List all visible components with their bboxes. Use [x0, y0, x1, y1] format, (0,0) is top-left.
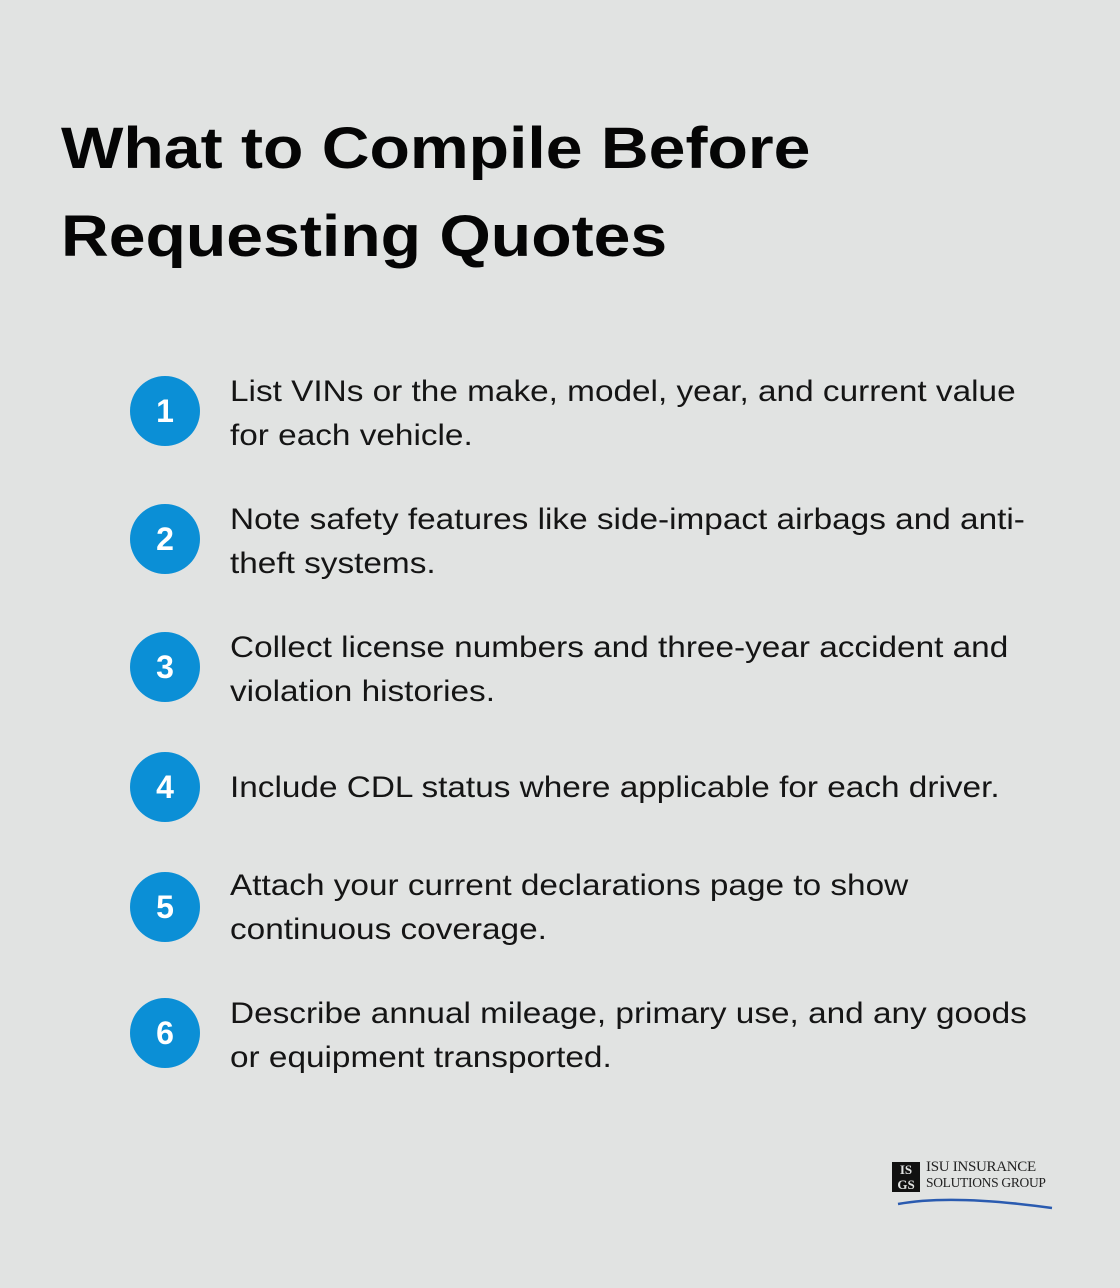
item 3: violation histories.	[230, 675, 495, 708]
item 1	[130, 375, 1016, 452]
logo: IS	[900, 1162, 912, 1177]
title	[61, 116, 810, 269]
item 2: Note safety features like side-impact airbags and anti-	[230, 503, 1025, 536]
item 4: Include CDL status where applicable for each driver.	[230, 771, 1000, 804]
logo: SOLUTIONS GROUP	[926, 1175, 1046, 1190]
item 4	[130, 752, 1000, 822]
item 5	[130, 869, 908, 946]
item 3	[130, 631, 1008, 708]
title: What to Compile Before	[61, 116, 810, 181]
item 6: Describe annual mileage, primary use, and any goods	[230, 997, 1027, 1030]
logo	[892, 1159, 1052, 1210]
item 1: for each vehicle.	[230, 419, 473, 452]
item 4: 4	[156, 769, 174, 805]
item 2: 2	[156, 521, 174, 557]
item 3: Collect license numbers and three-year accident and	[230, 631, 1008, 664]
item 6: 6	[156, 1015, 174, 1051]
item 1: List VINs or the make, model, year, and current value	[230, 375, 1016, 408]
item 6: or equipment transported.	[230, 1041, 612, 1074]
item 5: 5	[156, 889, 174, 925]
item 5: Attach your current declarations page to show	[230, 869, 908, 902]
item 2	[130, 503, 1025, 580]
item 6	[130, 997, 1027, 1074]
title: Requesting Quotes	[61, 204, 667, 269]
logo: ISU INSURANCE	[926, 1159, 1036, 1175]
item 1: 1	[156, 393, 174, 429]
logo: GS	[897, 1177, 915, 1192]
item 2: theft systems.	[230, 547, 436, 580]
item 3: 3	[156, 649, 174, 685]
item 5: continuous coverage.	[230, 913, 547, 946]
